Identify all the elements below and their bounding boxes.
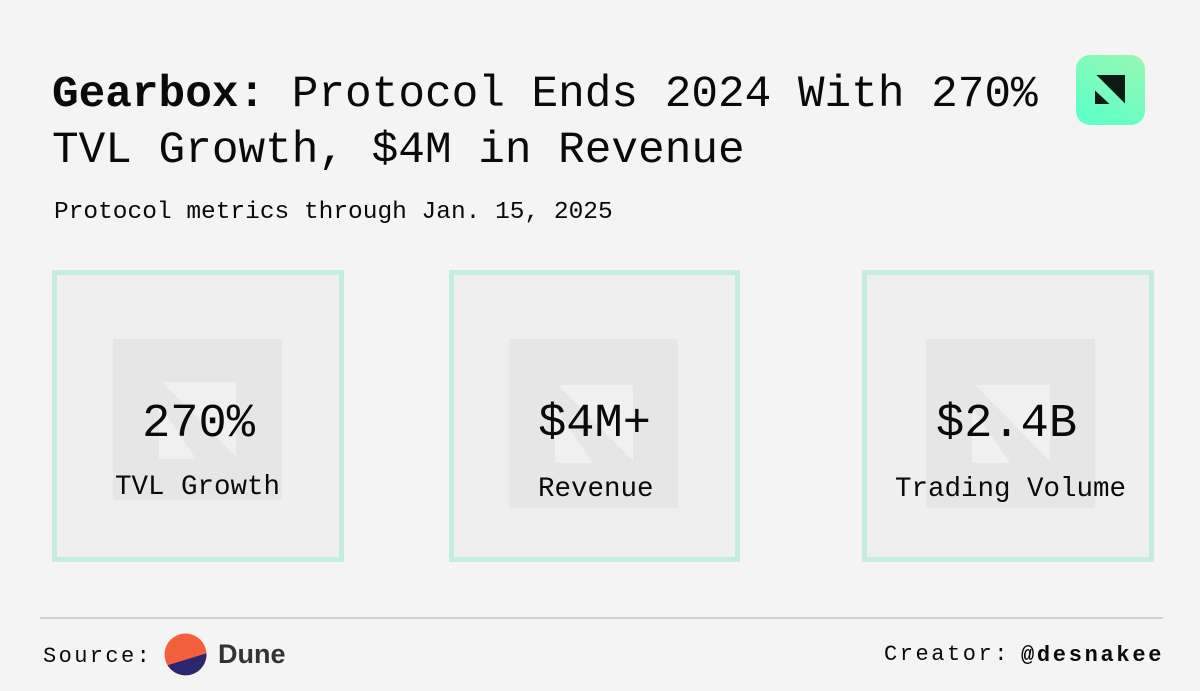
stat: $4M+: $4M+ [538,398,651,451]
title: Gearbox: Protocol Ends 2024 With 270% TVL Growth, $4M in Revenue [52,70,1038,176]
source label: Source: [43,644,152,669]
panel mark: trading volume [926,339,1095,508]
panel: trading volume [862,270,1154,562]
panel mark: revenue [509,339,678,508]
footer rule [40,617,1163,618]
icon: Dune logo [164,634,206,676]
label: Trading Volume: Trading Volume [895,474,1126,505]
label: Revenue: Revenue [538,474,654,505]
creator label: Creator: [884,642,1010,667]
creator handle: @desnakee [1021,643,1164,668]
panel: TVL growth [52,270,344,562]
panel: revenue [449,270,740,562]
subtitle: Protocol metrics through Jan. 15, 2025 [54,199,613,226]
Dune wordmark: Dune [218,639,286,669]
label: TVL Growth: TVL Growth [115,472,280,503]
stat: 270%: 270% [142,398,255,451]
stat: $2.4B: $2.4B [936,398,1077,451]
icon: Gearbox logo [1076,55,1145,125]
panel mark: TVL growth [113,339,282,500]
